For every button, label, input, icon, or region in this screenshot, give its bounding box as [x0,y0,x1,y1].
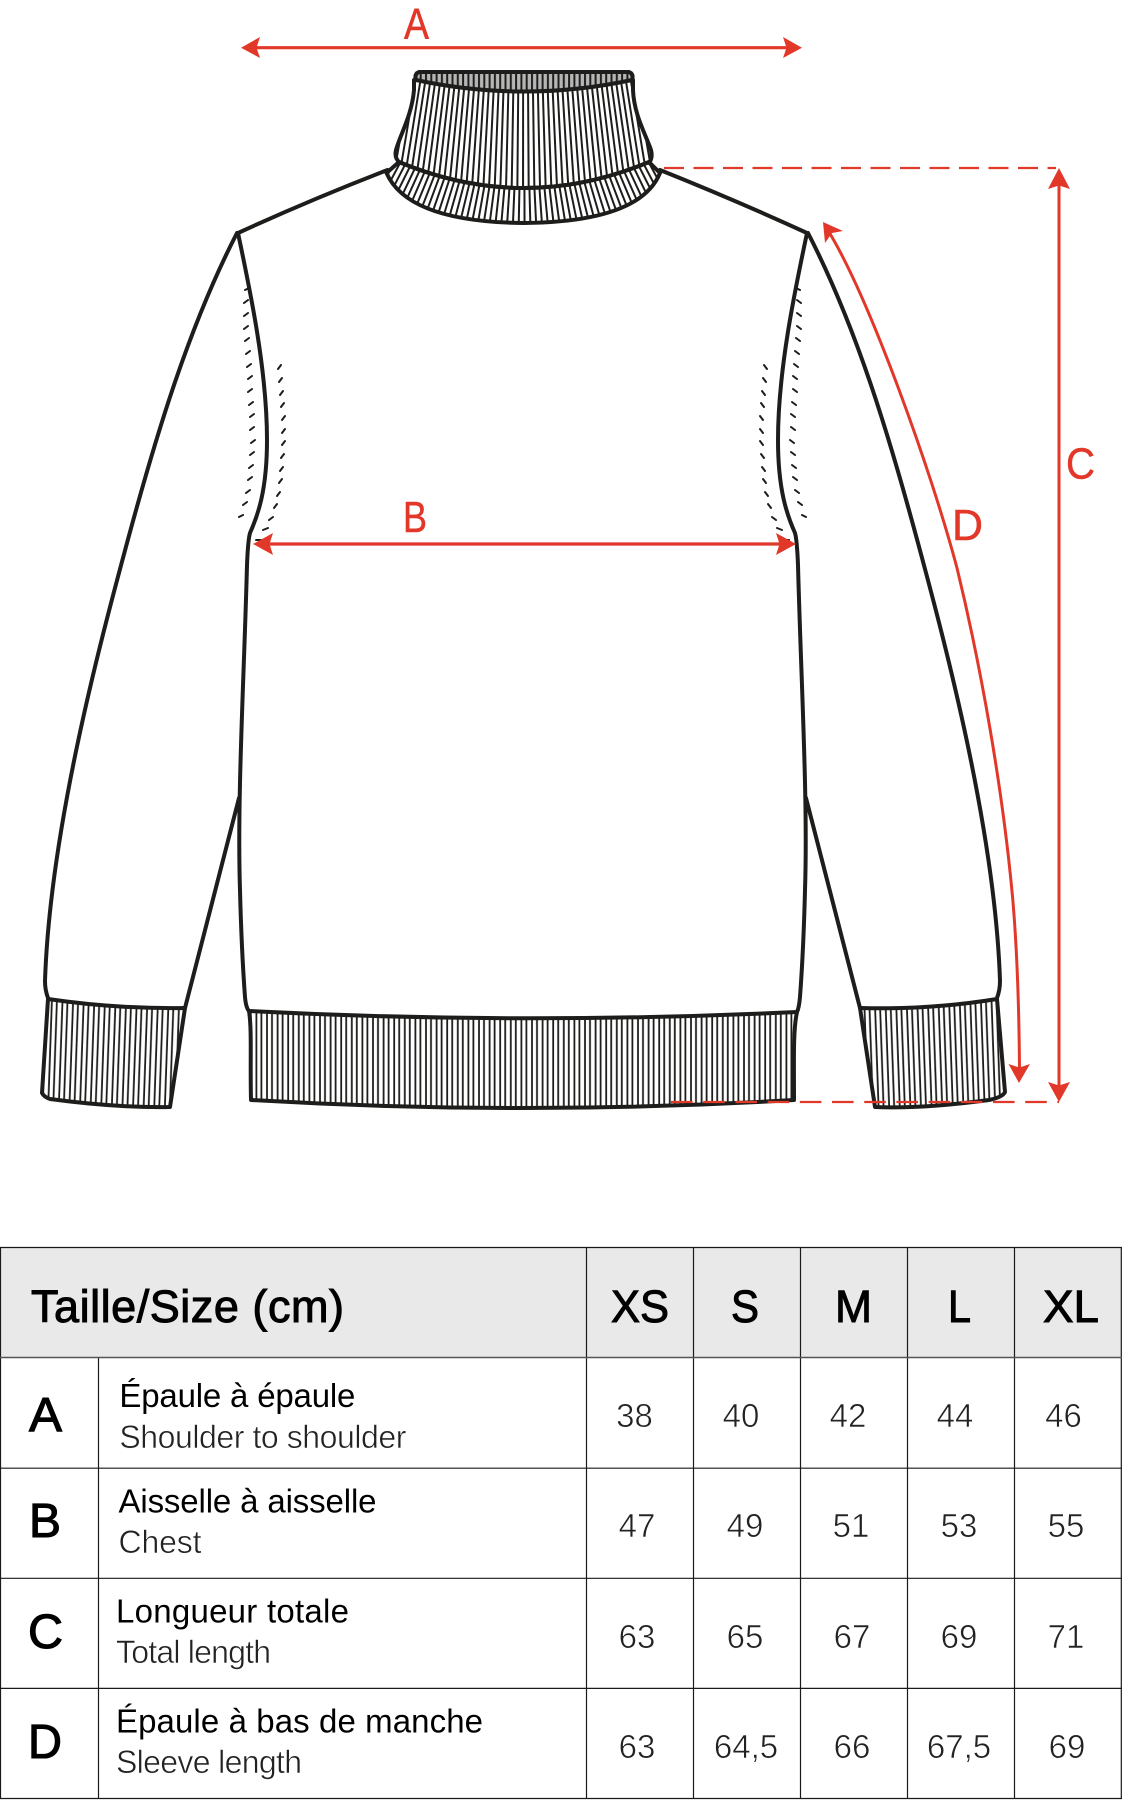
table header row [31,1281,1099,1332]
label A: A [404,0,430,49]
measure arrow A [241,0,802,58]
values C: 71 [1048,1618,1084,1655]
header title: Taille/Size (cm) [31,1281,344,1332]
values B: 55 [1048,1507,1084,1544]
row B [29,1482,1084,1560]
hem ribbing [249,1011,797,1108]
measure arrow C with dashed guides [664,168,1095,1102]
label B: B [403,493,427,542]
panel: sweater diagram [42,72,1005,1108]
measure arrow B [253,493,796,555]
English label C: Total length [116,1634,271,1670]
values D: 64,5 [714,1728,778,1765]
header XS: XS [611,1281,669,1332]
letter A: A [29,1389,62,1442]
values D [619,1728,1085,1765]
values C: 69 [941,1618,977,1655]
row D [28,1702,1085,1780]
French label C: Longueur totale [116,1592,349,1630]
header L: L [948,1281,971,1332]
French label B: Aisselle à aisselle [118,1482,376,1520]
header XL: XL [1043,1281,1099,1332]
row A [29,1377,1082,1455]
values D: 66 [834,1728,870,1765]
French label D: Épaule à bas de manche [116,1702,483,1740]
values A: 38 [616,1397,653,1434]
values B: 53 [941,1507,977,1544]
left cuff [42,999,185,1107]
stitch marks: left armhole [239,288,285,540]
table grid [0,1247,1122,1799]
values A: 40 [723,1397,759,1434]
table header background [0,1247,1122,1357]
label C: C [1066,440,1095,488]
values B: 51 [833,1507,869,1544]
measure arrow D [823,222,1030,1083]
header M: M [835,1281,872,1332]
values A [616,1397,1082,1434]
values C [619,1618,1084,1655]
English label A: Shoulder to shoulder [119,1419,407,1455]
values C: 63 [619,1618,655,1655]
values D: 63 [619,1728,655,1765]
sweater outline: body and sleeves [45,170,1000,1012]
values B: 47 [619,1507,655,1544]
row C [28,1592,1084,1670]
label D: D [952,501,983,550]
letter B: B [29,1495,61,1548]
letter C: C [28,1606,63,1659]
values B [619,1507,1084,1544]
letter D: D [28,1716,62,1769]
values C: 65 [727,1618,763,1655]
header S: S [731,1281,759,1332]
values D: 69 [1049,1728,1085,1765]
size table [0,1247,1122,1799]
English label D: Sleeve length [116,1744,302,1780]
values C: 67 [834,1618,870,1655]
right cuff [860,999,1005,1107]
values A: 46 [1045,1397,1082,1434]
values A: 42 [830,1397,866,1434]
values D: 67,5 [927,1728,991,1765]
stitch marks: right armhole [760,288,806,540]
turtleneck collar [380,72,668,188]
French label A: Épaule à épaule [119,1377,355,1414]
neck band ribbing [385,162,662,223]
values B: 49 [727,1507,763,1544]
English label B: Chest [118,1524,202,1560]
values A: 44 [937,1397,973,1434]
